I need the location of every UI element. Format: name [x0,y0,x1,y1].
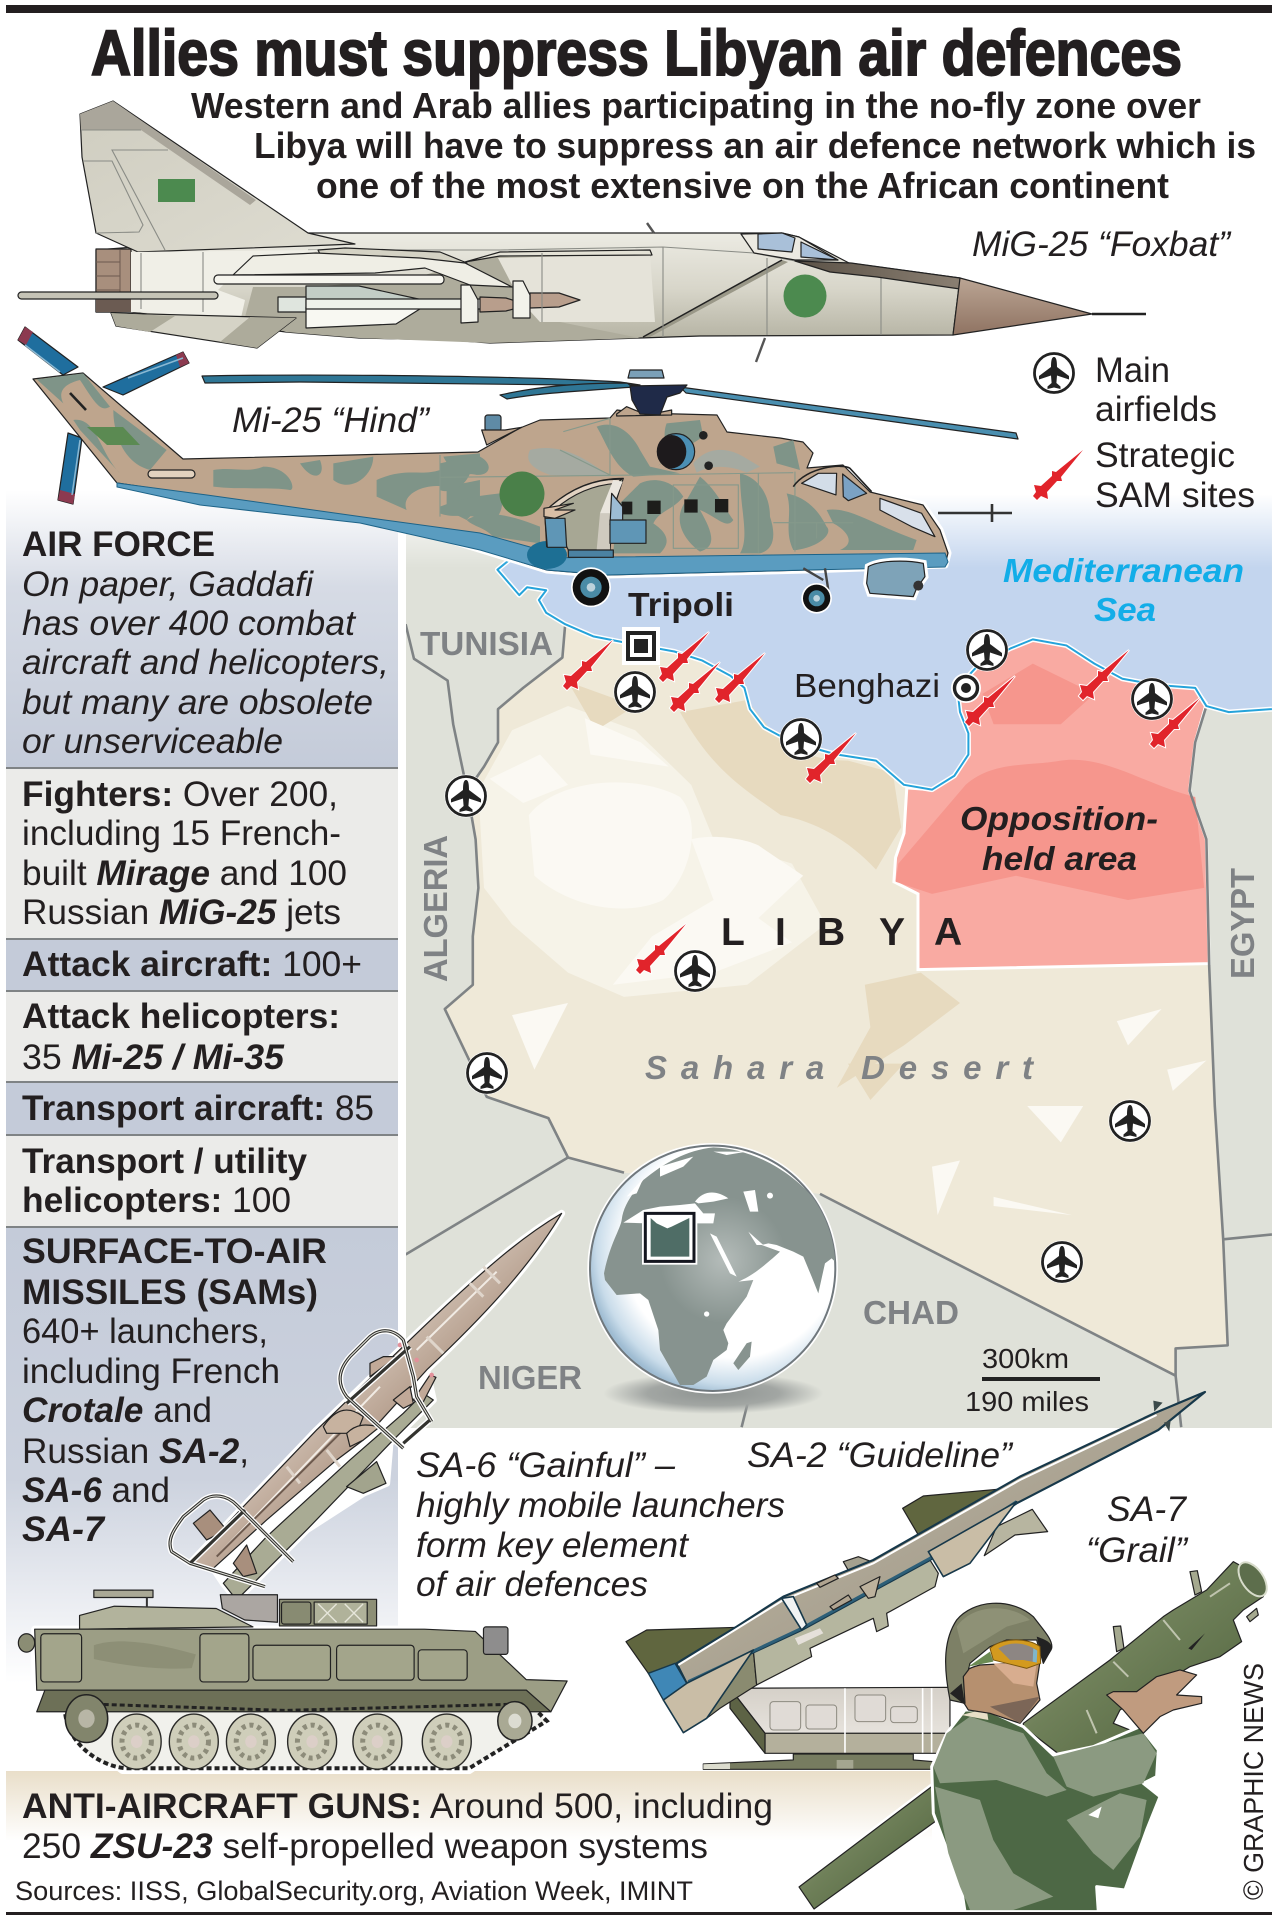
label: MiG-25: MiG-25 “Foxbat” [972,225,1231,264]
text: air force: has over 400 combat [22,604,356,643]
sea [497,495,1272,790]
rear dark fin [626,1627,738,1673]
tail flag [87,427,140,445]
caption: SA-2: SA-2 “Guideline” [747,1436,1013,1475]
caption: SA-6: of air defences [416,1565,648,1604]
text: air force: but many are obsolete [22,683,373,722]
text: air force: or unserviceable [22,722,283,761]
block: SAMs [6,1228,398,1683]
map labels: Benghazi [794,667,940,704]
map labels: NIGER [478,1359,582,1396]
map labels: Tripoli [628,586,734,623]
text: SAMs: Crotale and [22,1391,212,1430]
SAM site markers [563,632,1200,974]
launch rail [223,1393,433,1600]
panel lines [440,418,853,553]
bottom rule [6,1912,1272,1915]
text: attack helicopters: 35 Mi-25 / Mi-35 [22,1038,285,1077]
map labels: Opposition- [960,800,1158,837]
hull panels [41,1634,467,1682]
text: attack helicopters: Attack helicopters: [22,997,340,1036]
caption: SA-7: SA-7 [1107,1490,1188,1529]
legend [1032,351,1255,515]
missile fins [323,1410,363,1433]
text: fighters: Fighters: Over 200, [22,775,338,814]
text: transport helicopters [22,1142,308,1220]
air force panel [6,490,398,1683]
nose gun [938,504,1012,522]
front details [482,407,935,614]
fuselage [96,233,960,343]
main rotor [202,370,1018,439]
block: attack helicopters [6,992,398,1081]
panel lines [542,247,881,337]
helicopter: Mi-25 [18,327,1018,614]
map labels: EGYPT [1224,868,1261,979]
launcher base [730,1687,950,1733]
rear tan fin [663,1650,753,1733]
track [65,1700,547,1768]
locator globe [587,1143,838,1414]
legend text: SAM sites: SAM sites [1095,476,1255,515]
camouflage front [440,418,917,553]
roundel [500,472,544,516]
chin turret [867,561,925,597]
globe shadow [603,1373,823,1414]
dorsal fin [843,1557,872,1573]
text: transport aircraft: Transport aircraft: 85 [22,1089,374,1128]
text: fighters: Russian MiG-25 jets [22,893,341,932]
jacket [932,1710,1160,1912]
helmet [946,1603,1052,1703]
text: air force: On paper, Gaddafi [22,565,314,604]
text: transport helicopters: Transport / utility [22,1142,308,1181]
tail skid [148,470,195,478]
legend text: SAM sites [1095,436,1255,515]
coastline [497,560,1272,790]
fin tips [398,1343,402,1347]
launcher rear tube [799,1787,935,1909]
missile body [192,1213,562,1568]
roundel [784,274,826,318]
arm tip behind fore fin [984,1509,1048,1556]
belly band [117,483,948,575]
Libya [445,624,1228,1376]
launcher vehicle [18,1590,568,1771]
text: SAMs: MISSILES (SAMs) [22,1273,318,1312]
engine housing [545,478,623,550]
caption: SA-6: SA-6 “Gainful” – [416,1446,676,1485]
anti-aircraft text: 250 ZSU-23 self-propelled weapon systems [22,1827,708,1866]
label: Mi-25: Mi-25 “Hind” [232,401,430,440]
map labels: TUNISIA [420,625,553,662]
air intake [657,434,695,470]
anti-aircraft text: ANTI-AIRCRAFT GUNS: Around 500, including [22,1787,773,1826]
legend text: airfields [1095,351,1217,429]
text: SAMs: 640+ launchers, [22,1312,268,1351]
lower shaded band [245,252,652,343]
aircraft: MiG-25 [18,101,1146,362]
launcher front tube [1023,1562,1263,1755]
seas [623,1152,773,1317]
map labels: Mediterranean [1003,552,1244,589]
missiles [278,281,580,328]
map top fade [400,494,1278,568]
base panels [770,1695,917,1730]
caption: SA-6: highly mobile launchers [416,1486,785,1525]
legend text: airfields: Main [1095,351,1170,390]
caption: SA-6: form key element [416,1526,689,1565]
scale bar: 190 miles [965,1386,1089,1417]
goggles [968,1652,993,1667]
fuselage base [33,373,948,575]
text: transport helicopters: helicopters: 100 [22,1181,291,1220]
text: air force [22,525,389,761]
text: attack helicopters [22,997,340,1077]
exhaust nozzle [96,249,131,312]
map labels: Sahara Desert [645,1049,1035,1086]
icon: Tripoli city marker [622,627,660,665]
text: fighters: including 15 French- [22,814,341,853]
nose cone [953,278,1092,335]
road wheels [112,1714,471,1769]
text: SAMs: Russian SA-2, [22,1432,249,1471]
launcher sights [1113,1571,1258,1652]
fore tan fin [928,1502,1017,1577]
caption: SA-7 [1086,1490,1188,1570]
platform [703,1754,953,1769]
block: transport aircraft [6,1083,398,1134]
subtitle: Western and Arab allies participating in the no-fly zone over [191,85,1201,126]
drive sprocket [65,1695,108,1743]
upper spine line [308,247,795,261]
airfield markers [444,628,1174,1284]
fore dark fin [903,1488,1008,1535]
text: SAMs: SURFACE-TO-AIR [22,1232,327,1271]
neighbouring land [406,495,1274,1428]
launcher cages [170,1331,432,1587]
scale bar [965,1343,1100,1417]
subtitle: Libya will have to suppress an air defence network which is [254,125,1256,166]
text: air force: aircraft and helicopters, [22,643,389,682]
panel dividers [6,768,398,1227]
rear fuselage [131,250,320,318]
launch arm [707,1650,757,1718]
exhaust beacon [485,415,501,431]
text: air force: AIR FORCE [22,525,215,564]
top rule [6,5,1272,13]
desert light zone [478,706,826,997]
Libya locator box [642,1211,697,1265]
map labels [417,552,1261,1396]
canopy [741,233,838,260]
wing root rail [318,248,467,263]
legend text: SAM sites: Strategic [1095,436,1235,475]
collar [962,1708,988,1720]
sources: Sources: IISS, GlobalSecurity.org, Aviation Week, IMINT [15,1876,693,1906]
upper track run [88,1704,522,1710]
rotor mast base [617,407,672,416]
text: SAMs: including French [22,1352,280,1391]
legend text: airfields: airfields [1095,390,1217,429]
copyright: © GRAPHIC NEWS [1238,1663,1269,1900]
map labels: CHAD [863,1294,959,1331]
cabin windows [622,499,728,514]
nozzle [648,1663,687,1700]
text: attack aircraft: Attack aircraft: 100+ [22,945,362,984]
continents [604,1147,837,1385]
map labels: ALGERIA [417,835,454,982]
block: attack aircraft [6,940,398,990]
subtitle: one of the most extensive on the African continent [316,165,1169,206]
hull [35,1629,567,1712]
antennas [647,223,765,362]
caption: SA-7: “Grail” [1086,1531,1188,1570]
lower fin [413,1375,436,1405]
anti-aircraft text [22,1787,773,1866]
country borders [406,624,1272,1427]
subtitle [191,85,1256,206]
block: transport helicopters [6,1136,398,1226]
text: SAMs: SA-6 and [22,1471,170,1510]
desert tan patches [568,682,960,1100]
anti-aircraft band [6,1771,932,1841]
drop pylons [214,275,444,284]
map labels: Sea [1094,591,1156,628]
scale bar: 300km [982,1343,1069,1374]
tail rotor [18,327,189,504]
block: fighters [6,769,398,938]
nose fins [1153,1401,1171,1432]
missile body [677,1392,1205,1683]
tail plane [111,313,296,348]
illustration: SA-2 launcher [626,1392,1205,1769]
icon: airfield [1032,352,1076,394]
fin flag [158,179,195,202]
text: fighters: built Mirage and 100 [22,854,347,893]
nose dark band [795,261,960,289]
icon: Benghazi city marker [951,673,981,703]
cockpit glazing [802,473,837,495]
illustration: SA-6 launcher [18,1213,568,1771]
camouflage rear [37,373,480,520]
hand [1107,1670,1202,1733]
icon: SAM site [1033,450,1083,500]
jacket highlights [933,1717,1157,1910]
missile details [817,1575,852,1610]
text: fighters [22,775,347,932]
landing gear [803,568,828,590]
tail fin [80,101,355,252]
caption: SA-6 [416,1446,785,1604]
block: air force [6,490,398,767]
launcher missile and rail [170,1213,562,1600]
desert white patches [490,718,1206,1215]
map labels: LIBYA [721,911,962,954]
map [400,494,1278,1428]
nose probe [1092,313,1146,315]
text: SAMs: SA-7 [22,1510,106,1549]
opposition-held area [894,639,1209,970]
turret [80,1606,253,1629]
illustration: soldier with SA-7 [799,1557,1272,1912]
wing [233,253,512,287]
neck and face [960,1662,1040,1723]
map labels: held area [982,840,1137,877]
intake diagonal [643,260,788,337]
text: SAMs [22,1232,327,1549]
